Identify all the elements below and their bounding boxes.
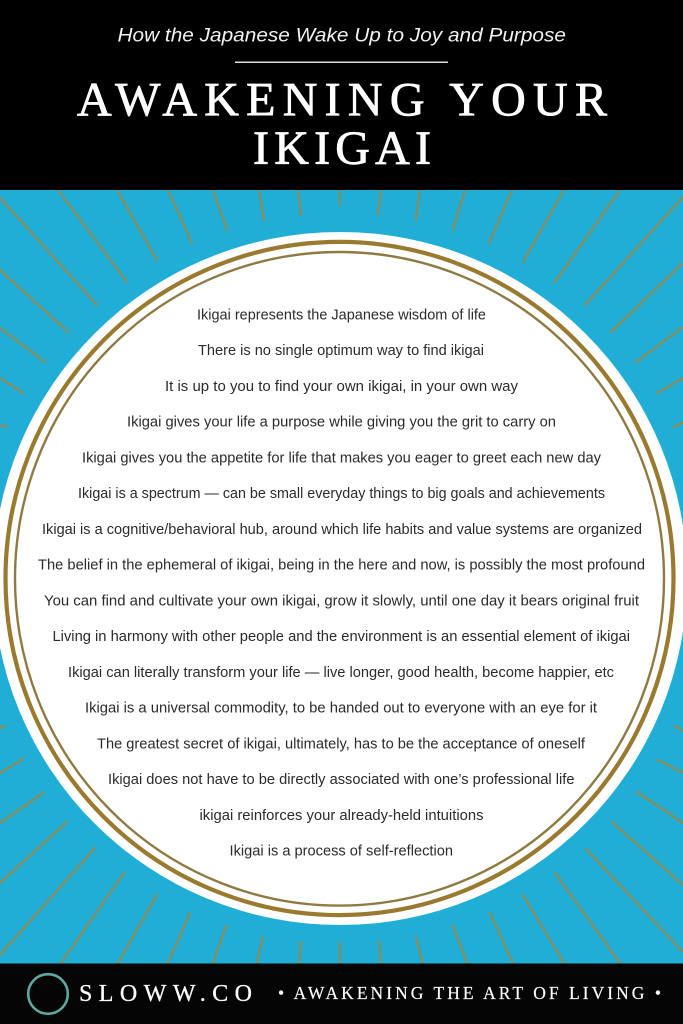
panel: black footer (0, 964, 683, 1024)
text block: ikigai statements: There is no single optimum way to find ikigai (198, 343, 484, 359)
tagline: • AWAKENING THE ART OF LIVING • (278, 983, 661, 1003)
text block: ikigai statements: It is up to you to find your own ikigai, in your own way (165, 379, 519, 395)
icon: teal ring logo (28, 974, 68, 1014)
title (77, 74, 607, 175)
text block: ikigai statements: Ikigai gives you the appetite for life that makes you eager to greet each new day (82, 450, 602, 466)
text block: ikigai statements: Ikigai gives your life a purpose while giving you the grit to carry on (127, 415, 556, 431)
text block: ikigai statements: Ikigai is a universal commodity, to be handed out to everyone with an eye for it (85, 701, 597, 717)
title: IKIGAI (253, 122, 431, 175)
text block: ikigai statements: The belief in the ephemeral of ikigai, being in the here and now, is possibly the most profound (38, 558, 645, 574)
text block: ikigai statements: The greatest secret of ikigai, ultimately, has to be the acceptance of oneself (97, 736, 586, 752)
panel: white circle with gold rings (0, 232, 683, 925)
brand name: SLOWW.CO (79, 981, 252, 1007)
divider rule (235, 62, 448, 63)
sun rays (0, 190, 683, 963)
text block: ikigai statements: Living in harmony with other people and the environment is an essential element of ikigai (52, 629, 630, 645)
text block: ikigai statements: Ikigai can literally transform your life — live longer, good health, become happier, etc (68, 665, 614, 681)
panel: blue sunburst background (0, 190, 683, 964)
text block: ikigai statements: Ikigai does not have to be directly associated with one’s professional life (108, 772, 574, 788)
panel: black header (0, 0, 683, 190)
text block: ikigai statements (38, 307, 645, 860)
text block: ikigai statements: Ikigai is a spectrum — can be small everyday things to big goals and achievements (78, 486, 605, 502)
subtitle: How the Japanese Wake Up to Joy and Purpose (118, 24, 566, 46)
text block: ikigai statements: Ikigai is a process of self-reflection (230, 844, 453, 860)
text block: ikigai statements: ikigai reinforces your already-held intuitions (200, 808, 484, 824)
title: AWAKENING YOUR (77, 74, 607, 126)
text block: ikigai statements: Ikigai represents the Japanese wisdom of life (197, 307, 486, 323)
text block: ikigai statements: Ikigai is a cognitive/behavioral hub, around which life habits and value systems are organized (42, 522, 642, 538)
text block: ikigai statements: You can find and cultivate your own ikigai, grow it slowly, until one day it bears original fruit (44, 593, 639, 609)
